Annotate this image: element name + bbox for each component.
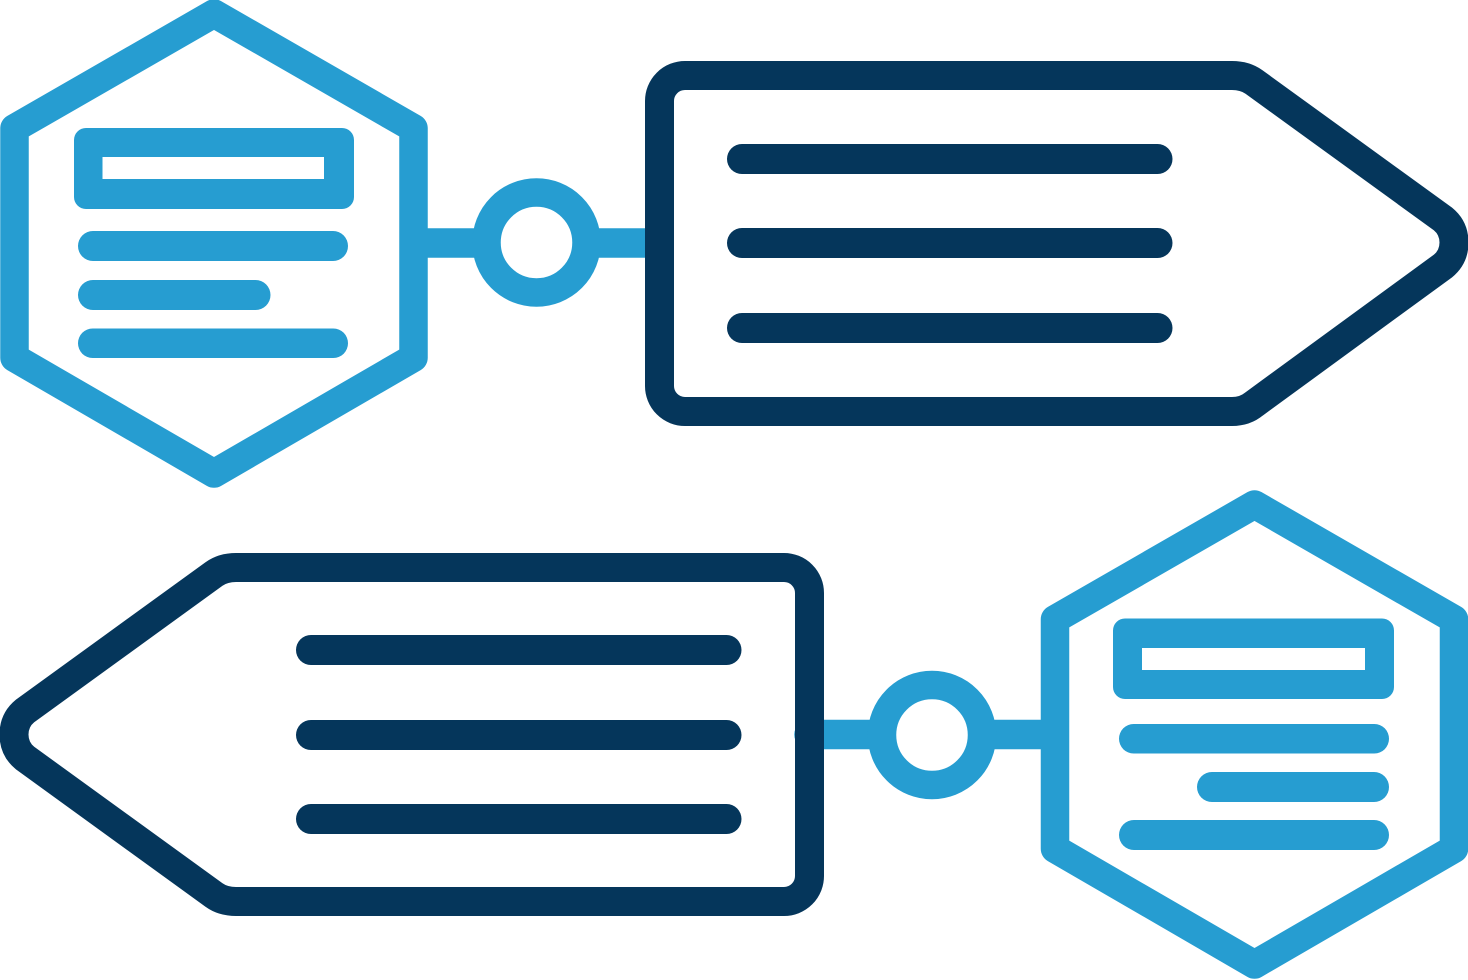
document header box: top left [74,128,354,209]
connector: bottom row [809,685,1050,785]
text lines: top right tag [742,159,1158,328]
hexagon outline: top left [14,14,414,474]
text lines: top left [78,231,348,358]
hexagon document icon: top left [14,14,414,474]
tag outline: bottom left [14,568,810,902]
hexagon outline: bottom right [1055,504,1454,964]
text lines: bottom right [1119,724,1389,850]
connector: top row [420,192,650,292]
text lines: bottom left tag [311,650,726,819]
connector node: bottom row [882,685,982,785]
document header box: bottom right [1113,618,1394,699]
arrow tag panel: bottom left [14,568,810,902]
hexagon document icon: bottom right [1055,504,1454,964]
connector node: top row [486,192,586,292]
tag outline: top right [660,76,1454,412]
arrow tag panel: top right [660,76,1454,412]
